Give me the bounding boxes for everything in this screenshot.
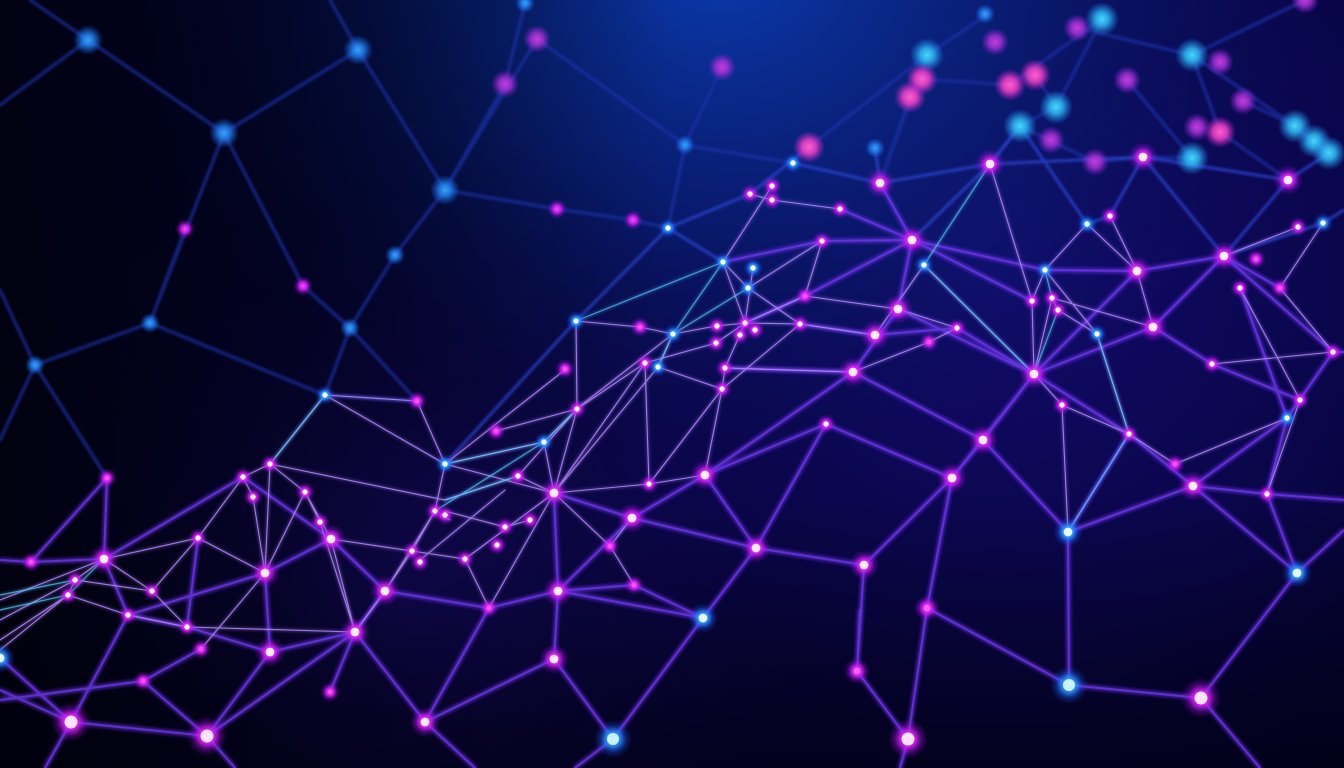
far network edges	[0, 0, 1344, 478]
mid network edges	[0, 183, 1344, 768]
cyan highlight edges	[0, 164, 1129, 610]
bright magenta nodes	[21, 142, 1343, 759]
bright blue nodes	[0, 153, 1333, 758]
near network edges	[0, 164, 1333, 650]
soft background nodes	[25, 0, 1344, 375]
